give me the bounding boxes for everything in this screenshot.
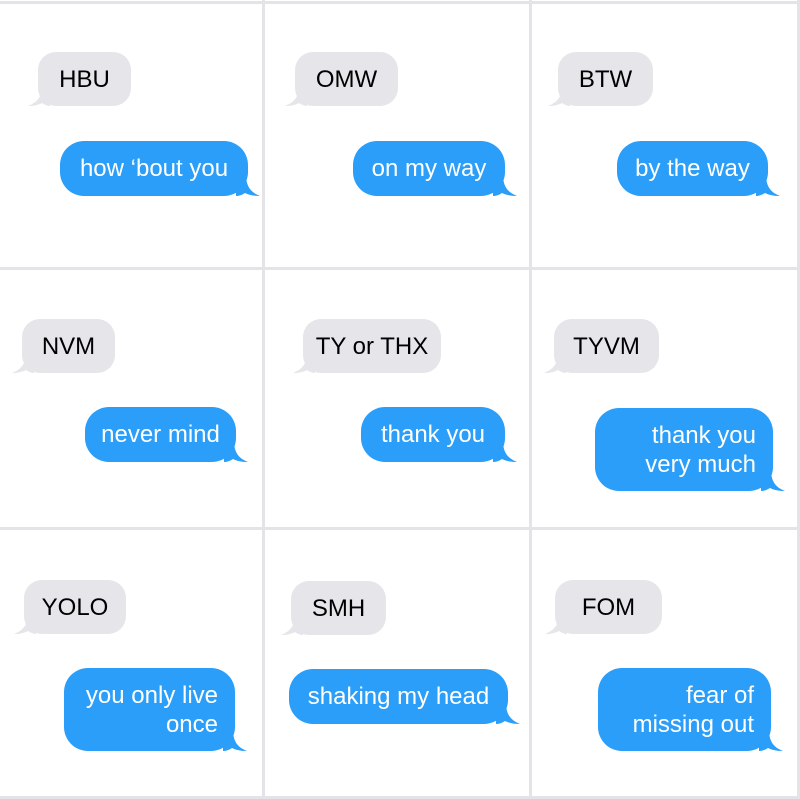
bubble: fear of missing out (598, 668, 771, 751)
bubble: on my way (353, 141, 505, 196)
bubble: OMW: OMW (316, 66, 377, 92)
bubble: YOLO: YOLO (42, 594, 108, 620)
bubble: you only live once: you only live (86, 682, 218, 708)
bubble: never mind: never mind (101, 421, 220, 448)
bubble: thank you very much (595, 408, 773, 491)
bubble: shaking my head: shaking my head (308, 683, 489, 710)
bubble: HBU: HBU (59, 66, 110, 92)
panel: SMH (282, 581, 520, 724)
bubble: shaking my head (289, 669, 508, 724)
panel: TY or THX (294, 319, 517, 462)
bubble: thank you: thank you (381, 421, 485, 448)
bubble: by the way (617, 141, 768, 196)
bubble: you only live once: once (166, 710, 218, 738)
bubble: FOM: FOM (582, 594, 635, 620)
bubble: TY or THX (303, 319, 441, 373)
bubble: BTW: BTW (579, 66, 632, 92)
bubble: thank you (361, 407, 505, 462)
bubble: TYVM (554, 319, 659, 373)
bubble: BTW (558, 52, 653, 106)
bubble: on my way: on my way (372, 155, 486, 182)
bubble: TYVM: TYVM (573, 332, 640, 360)
bubble: SMH: SMH (312, 594, 365, 622)
bubble: how 'bout you: how ‘bout you (80, 155, 228, 182)
panel: FOM (546, 580, 783, 751)
bubble: fear of missing out: fear of (686, 682, 754, 708)
bubble: YOLO (24, 580, 126, 634)
bubble: FOM (555, 580, 662, 634)
panel: BTW (548, 52, 780, 196)
bubble: OMW (295, 52, 398, 106)
bubble: TY or THX: TY or THX (316, 332, 428, 360)
panel: TYVM (544, 319, 785, 491)
panel: NVM (12, 319, 248, 462)
panel: YOLO (14, 580, 247, 751)
bubble: by the way: by the way (635, 155, 750, 182)
bubble: you only live once (64, 668, 235, 751)
bubble: SMH (291, 581, 386, 635)
bubble: fear of missing out: missing out (633, 710, 754, 738)
bubble: thank you very much: very much (645, 450, 756, 478)
bubble: never mind (85, 407, 236, 462)
panel: OMW (286, 52, 517, 196)
bubble: NVM: NVM (42, 332, 95, 360)
bubble: how 'bout you (60, 141, 248, 196)
panel: HBU (28, 52, 260, 196)
bubble: HBU (38, 52, 131, 106)
bubble: NVM (22, 319, 115, 373)
bubble: thank you very much: thank you (652, 422, 756, 448)
